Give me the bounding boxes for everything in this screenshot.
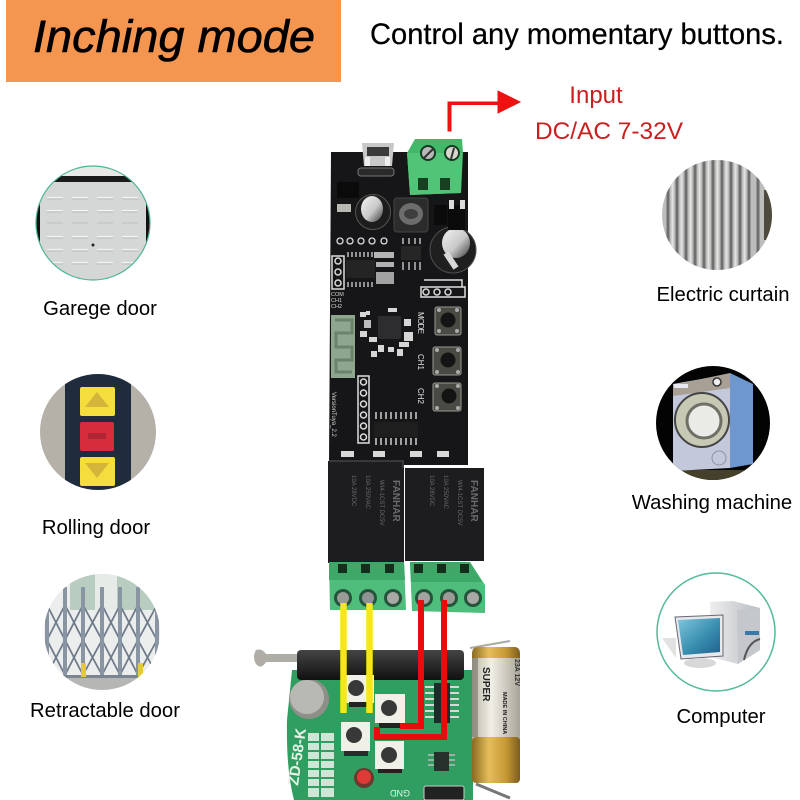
board: microcontroller <box>360 308 413 357</box>
remote: green PCB <box>287 670 473 800</box>
board: tactile button MODE <box>435 307 461 335</box>
remote control module <box>254 641 520 800</box>
relay right: WI4-1CST DC5V <box>456 480 462 526</box>
heading: Control any momentary buttons: Control any momentary buttons. <box>370 18 784 51</box>
callout: input voltage: DC/AC 7-32V <box>535 118 683 145</box>
label: washing machine: Washing machine <box>632 492 792 514</box>
board: black PCB <box>329 152 468 465</box>
board: silkscreen COM CH1 CH2: COM <box>331 292 344 298</box>
board: green power terminal <box>407 139 463 195</box>
remote: button 2 <box>375 694 405 728</box>
board: pin header <box>358 376 369 443</box>
relay right: 10A 28VDC <box>428 475 434 507</box>
board: tactile button CH1 <box>433 347 461 375</box>
remote: small chip <box>428 752 455 771</box>
board: wifi antenna <box>331 315 355 378</box>
terminal block right <box>410 562 485 613</box>
device: rolling door buttons <box>40 374 156 490</box>
board: capacitor left <box>356 194 390 230</box>
header banner: Inching mode <box>6 0 341 82</box>
remote: battery: 23A 12V <box>513 659 520 686</box>
board: silkscreen COM CH1 CH2 <box>331 292 344 310</box>
board: MODE CH1 CH2 labels <box>416 312 425 405</box>
device: electric curtain <box>662 160 774 270</box>
remote: encoder chip <box>425 683 459 723</box>
remote: crystal <box>289 679 329 719</box>
remote: button 4 <box>375 741 404 773</box>
remote: GND pads: GND <box>390 788 410 798</box>
relay right: FANHAR <box>468 480 479 522</box>
header banner: Inching mode: Inching mode <box>33 11 315 62</box>
remote: battery: MADE IN CHINA <box>501 692 507 734</box>
remote: dip pads <box>308 733 334 797</box>
arrow: power input <box>448 91 520 131</box>
board: tactile button CH2 <box>433 383 461 411</box>
remote: red LED <box>354 768 374 788</box>
board: LED pads <box>341 451 449 457</box>
controller board <box>329 139 476 465</box>
board: inductor coil <box>394 198 428 232</box>
relay left <box>328 461 404 563</box>
remote: battery <box>470 641 520 798</box>
red wires <box>377 600 444 737</box>
yellow wires <box>344 603 370 713</box>
remote: antenna <box>254 650 464 680</box>
relay left: 10A 250VAC <box>364 475 370 510</box>
terminal block left <box>329 562 406 610</box>
device: washing machine <box>656 366 770 480</box>
board: MODE CH1 CH2 labels: CH1 <box>416 354 425 371</box>
device: computer <box>657 573 775 691</box>
board: version silkscreen: VersionTuya_2.2 <box>330 392 336 437</box>
label: retractable door: Retractable door <box>30 700 180 722</box>
remote: silkscreen ZD-58-K: ZD-58-K <box>285 727 310 787</box>
board: silkscreen COM CH1 CH2: CH2 <box>331 304 342 310</box>
device: retractable door <box>44 574 160 690</box>
relay right: 10A 250VAC <box>442 475 448 510</box>
remote: button 1 <box>346 675 374 707</box>
board: MODE CH1 CH2 labels: CH2 <box>416 388 425 405</box>
remote: button 3 <box>341 722 370 756</box>
board: chips and pads <box>337 182 465 287</box>
device: garage door <box>36 166 150 280</box>
board: capacitor right <box>430 227 476 273</box>
board: pin header JP <box>332 256 344 289</box>
board: relay driver chip <box>374 412 418 445</box>
remote: GND pads <box>390 786 464 800</box>
board: MODE CH1 CH2 labels: MODE <box>416 312 425 334</box>
label: computer: Computer <box>676 706 766 728</box>
relay left: WI4-1CST DC5V <box>378 480 384 526</box>
label: rolling door: Rolling door <box>42 517 150 539</box>
board: micro USB port <box>358 143 394 176</box>
relay right <box>405 468 484 561</box>
board: silkscreen COM CH1 CH2: CH1 <box>331 298 342 304</box>
board: three pin connector <box>421 280 465 297</box>
relay left: 10A 28VDC <box>350 475 356 507</box>
remote: battery: SUPER <box>480 667 491 702</box>
label: electric curtain: Electric curtain <box>656 284 790 306</box>
relay left: FANHAR <box>390 480 401 522</box>
label: garage door: Garege door <box>43 298 157 320</box>
callout: input voltage <box>535 82 683 145</box>
callout: input voltage: Input <box>569 82 623 109</box>
